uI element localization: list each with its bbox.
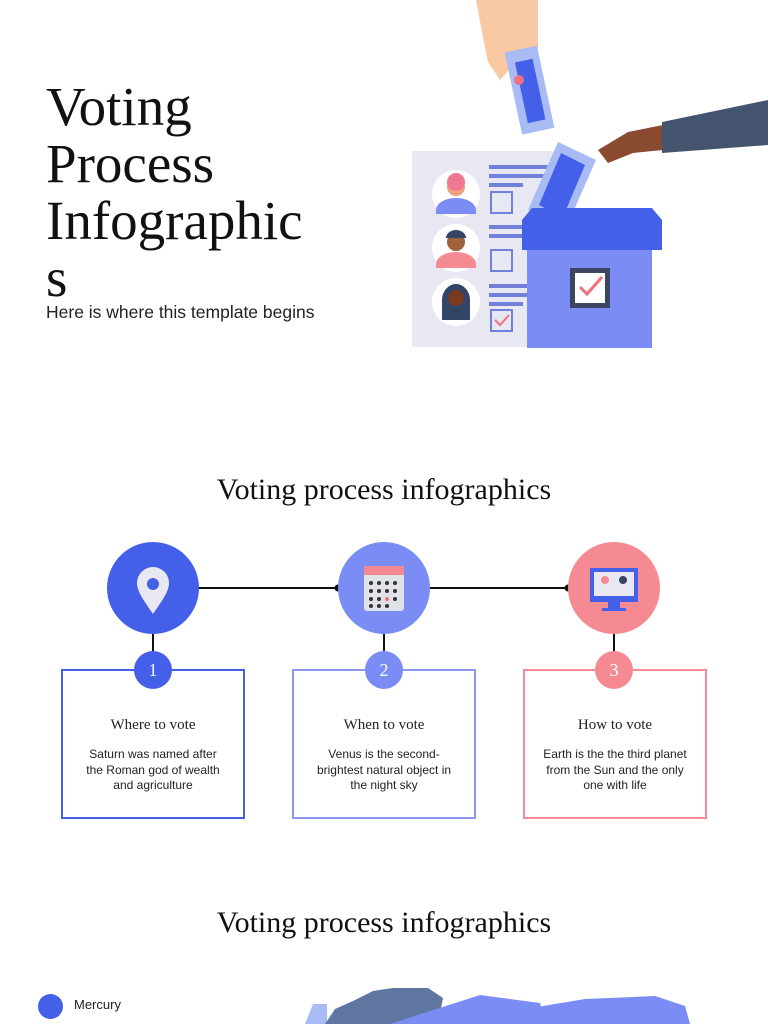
card 1: Saturn was named after the Roman god of wealth and agriculture — [86, 747, 220, 792]
illustration: ballot box — [412, 0, 768, 348]
number badges: 1 — [148, 660, 158, 680]
card 2: Venus is the second-brightest natural object in the night sky — [317, 747, 451, 792]
icon: monitor — [568, 542, 660, 634]
title: Voting — [46, 76, 192, 137]
title: Infographic — [46, 190, 303, 251]
title: s — [46, 247, 67, 308]
card 3 — [523, 669, 707, 819]
card 3: Earth is the the third planet from the Sun and the only one with life — [543, 747, 687, 792]
title: Process — [46, 133, 214, 194]
text: 2 — [380, 660, 388, 680]
text: 3 — [610, 660, 618, 680]
map — [305, 988, 690, 1024]
subtitle: Here is where this template begins — [46, 302, 314, 322]
card 2 — [292, 669, 476, 819]
timeline connector — [152, 584, 615, 652]
card 1: Where to vote — [111, 717, 195, 733]
icon: location pin — [107, 542, 199, 634]
section heading 2: Voting process infographics — [217, 906, 551, 939]
icon: calendar — [338, 542, 430, 634]
title — [46, 76, 303, 308]
card 2: When to vote — [344, 717, 424, 733]
card 1 — [61, 669, 245, 819]
number badges — [134, 651, 172, 689]
section heading 1: Voting process infographics — [217, 473, 551, 506]
legend: Mercury — [38, 994, 121, 1019]
card 3: How to vote — [578, 717, 652, 733]
legend: Mercury: Mercury — [74, 997, 121, 1012]
